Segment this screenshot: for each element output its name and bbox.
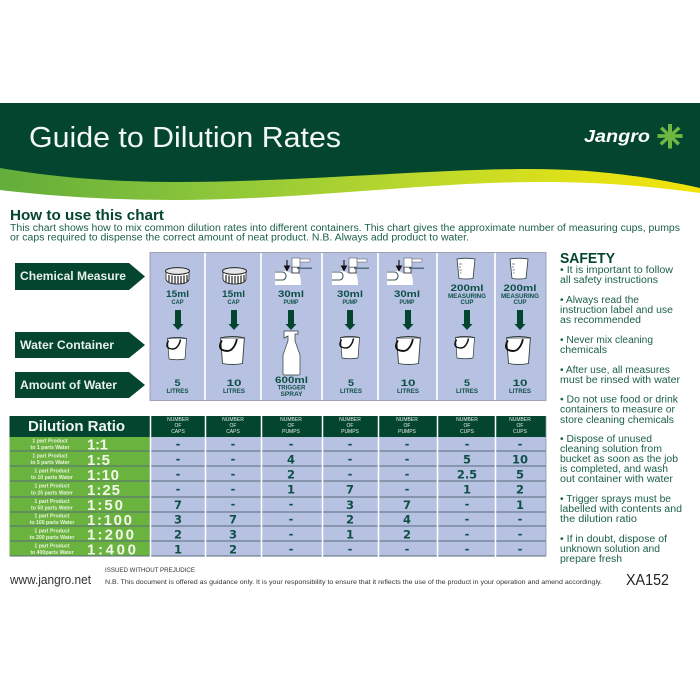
safety list: all safety instructions bbox=[560, 275, 658, 286]
row 1:1: - bbox=[405, 437, 410, 451]
row 1:10: 1:10 bbox=[87, 467, 119, 484]
row 1:10: - bbox=[231, 467, 236, 481]
row 1:5 bbox=[30, 452, 528, 469]
safety list: as recommended bbox=[560, 315, 641, 326]
row 1:10: 5 bbox=[516, 468, 524, 482]
row 1:200: 2 bbox=[403, 528, 411, 542]
row 1:100: 4 bbox=[403, 512, 411, 526]
green swoosh bbox=[0, 160, 700, 200]
safety list: must be rinsed with water bbox=[560, 375, 681, 386]
row 1:200: 2 bbox=[174, 528, 182, 542]
safety list: labelled with contents and bbox=[560, 504, 682, 515]
column 1: cap, 5 litres: LITRES bbox=[166, 389, 188, 395]
arrow label: chemical measure: Chemical Measure bbox=[20, 271, 126, 283]
arrow label: amount of water: Amount of Water bbox=[20, 380, 118, 392]
row 1:200: - bbox=[289, 527, 294, 541]
row 1:400: 1 bbox=[174, 542, 182, 556]
row 1:25: 1 bbox=[287, 482, 295, 496]
dark green band bbox=[0, 103, 700, 188]
row 1:100 bbox=[30, 512, 523, 529]
row 1:200 bbox=[30, 526, 523, 544]
row 1:5: 5 bbox=[463, 452, 471, 466]
row 1:25: - bbox=[231, 482, 236, 496]
column 6: measuring cup, 5 litres: 200ml bbox=[450, 283, 484, 293]
column 7: measuring cup, 10 litres: 10 bbox=[512, 378, 528, 388]
row 1:10: 1 part Product bbox=[34, 468, 70, 474]
safety list: • If in doubt, dispose of bbox=[560, 534, 667, 545]
row 1:400: - bbox=[289, 542, 294, 556]
row 1:5: 10 bbox=[512, 452, 528, 466]
row 1:25: 7 bbox=[346, 482, 354, 496]
row 1:10: to 10 parts Water bbox=[31, 475, 73, 481]
how to use heading: How to use this chart bbox=[10, 207, 164, 224]
row 1:50: 1 part Product bbox=[34, 499, 70, 505]
row 1:25: 2 bbox=[516, 482, 524, 496]
title: Guide to Dilution Rates bbox=[29, 122, 341, 154]
arrow label: water container: Water Container bbox=[20, 340, 115, 352]
column headers: PUMPS bbox=[282, 429, 301, 435]
issued without prejudice: ISSUED WITHOUT PREJUDICE bbox=[105, 567, 196, 574]
column headers: OF bbox=[347, 423, 353, 429]
row 1:50: - bbox=[289, 497, 294, 511]
safety list: • After use, all measures bbox=[560, 365, 670, 376]
safety list: is completed, and wash bbox=[560, 464, 668, 475]
row 1:5: to 5 parts Water bbox=[30, 460, 70, 466]
column 5: pump, 10 litres: 30ml bbox=[394, 289, 420, 299]
column 4: pump, 5 litres: 5 bbox=[348, 378, 354, 388]
column headers: NUMBER bbox=[509, 417, 531, 423]
document code: XA152 bbox=[626, 572, 669, 589]
row 1:50: 7 bbox=[403, 498, 411, 512]
column 3: pump, trigger spray: 600ml bbox=[275, 375, 308, 385]
row 1:5: - bbox=[176, 452, 181, 466]
column 1: cap, 5 litres: 5 bbox=[174, 378, 180, 388]
row 1:50: to 50 parts Water bbox=[31, 506, 73, 512]
column 7: measuring cup, 10 litres: MEASURING bbox=[501, 294, 539, 300]
how to use text bbox=[10, 223, 680, 244]
safety list: • Always read the bbox=[560, 295, 639, 306]
column headers: PUMPS bbox=[341, 429, 360, 435]
column 7: measuring cup, 10 litres: LITRES bbox=[509, 389, 531, 395]
column 7: measuring cup, 10 litres: CUP bbox=[514, 300, 526, 306]
column 7: measuring cup, 10 litres: 200ml bbox=[504, 283, 536, 293]
row 1:1: - bbox=[518, 437, 523, 451]
row 1:1: 1:1 bbox=[87, 436, 108, 454]
row 1:1: 1 part Product bbox=[32, 438, 68, 444]
column 2: cap, 10 litres: 15ml bbox=[222, 289, 245, 299]
safety list: containers to measure or bbox=[560, 404, 676, 416]
row 1:400 bbox=[30, 542, 523, 558]
column 5: pump, 10 litres: 10 bbox=[400, 378, 416, 388]
row 1:1: - bbox=[289, 437, 294, 451]
row 1:400: - bbox=[465, 542, 470, 556]
row 1:10: - bbox=[405, 467, 410, 481]
row 1:400: 1 part Product bbox=[34, 544, 70, 550]
row 1:1: - bbox=[231, 437, 236, 451]
website: www.jangro.net bbox=[9, 573, 91, 587]
row 1:50: - bbox=[465, 497, 470, 511]
safety list: • Never mix cleaning bbox=[560, 335, 653, 346]
column headers: NUMBER bbox=[167, 417, 189, 423]
row 1:25: - bbox=[405, 482, 410, 496]
row 1:25: 1 part Product bbox=[34, 484, 70, 490]
row 1:100: - bbox=[518, 512, 523, 526]
column headers: PUMPS bbox=[398, 429, 417, 435]
row 1:1 bbox=[30, 436, 523, 454]
row 1:25: 1:25 bbox=[87, 482, 120, 499]
safety list: instruction label and use bbox=[560, 305, 673, 316]
row 1:100: - bbox=[465, 512, 470, 526]
row labels bbox=[15, 263, 145, 398]
row 1:100: 2 bbox=[346, 512, 354, 526]
safety heading: SAFETY bbox=[560, 251, 615, 267]
row 1:10 bbox=[31, 467, 524, 484]
row 1:200: 1 bbox=[346, 528, 354, 542]
column 5: pump, 10 litres bbox=[387, 258, 424, 395]
row 1:5: - bbox=[231, 452, 236, 466]
column 4: pump, 5 litres: LITRES bbox=[340, 389, 362, 395]
column 6: measuring cup, 5 litres: MEASURING bbox=[448, 294, 486, 300]
row 1:1: - bbox=[176, 437, 181, 451]
footer bbox=[9, 567, 669, 589]
safety list: • Trigger sprays must be bbox=[560, 494, 671, 505]
row 1:100: 1 part Product bbox=[34, 514, 70, 520]
row 1:400: 1:400 bbox=[87, 542, 136, 558]
safety list: the dilution ratio bbox=[560, 514, 637, 525]
how to use text: This chart shows how to mix common dilution rates into different containers. This chart gives the approximate number of measuring cups, pumps bbox=[10, 223, 680, 234]
row 1:1: to 1 parts Water bbox=[30, 445, 70, 451]
row 1:1: - bbox=[348, 437, 353, 451]
safety list: store cleaning chemicals bbox=[560, 415, 674, 426]
column headers: NUMBER bbox=[396, 417, 418, 423]
row 1:25: - bbox=[176, 482, 181, 496]
row 1:100: 7 bbox=[229, 512, 237, 526]
row 1:25 bbox=[31, 482, 524, 499]
row 1:100: to 100 parts Water bbox=[30, 520, 74, 526]
column 6: measuring cup, 5 litres: 5 bbox=[464, 378, 470, 388]
dilution table bbox=[10, 416, 546, 558]
row 1:10: - bbox=[176, 467, 181, 481]
column headers: OF bbox=[288, 423, 294, 429]
column 2: cap, 10 litres: CAP bbox=[228, 300, 240, 306]
row 1:50: 1:50 bbox=[87, 497, 123, 514]
column 2: cap, 10 litres: 10 bbox=[226, 378, 242, 388]
column headers: CUPS bbox=[513, 429, 528, 435]
row 1:400: to 400parts Water bbox=[30, 550, 74, 556]
column headers: CUPS bbox=[460, 429, 475, 435]
column headers: CAPS bbox=[226, 429, 240, 435]
row 1:200: 1:200 bbox=[87, 526, 134, 544]
column 3: pump, trigger spray bbox=[275, 258, 312, 398]
column 5: pump, 10 litres: LITRES bbox=[397, 389, 419, 395]
column headers: NUMBER bbox=[222, 417, 244, 423]
safety list: bucket as soon as the job bbox=[560, 454, 678, 465]
column 1: cap, 5 litres: 15ml bbox=[166, 289, 189, 299]
row 1:200: 1 part Product bbox=[34, 528, 70, 534]
row 1:200: - bbox=[465, 527, 470, 541]
row 1:100: 1:100 bbox=[87, 512, 132, 529]
row 1:100: - bbox=[289, 512, 294, 526]
safety list: unknown solution and bbox=[560, 544, 660, 555]
column 2: cap, 10 litres bbox=[220, 268, 246, 395]
column headers bbox=[167, 417, 531, 435]
row 1:10: - bbox=[348, 467, 353, 481]
safety list: • Dispose of unused bbox=[560, 434, 652, 445]
safety list: cleaning solution from bbox=[560, 444, 662, 455]
row 1:400: - bbox=[518, 542, 523, 556]
row 1:25: 1 bbox=[463, 482, 471, 496]
row 1:5: 1:5 bbox=[87, 452, 110, 469]
row 1:400: 2 bbox=[229, 542, 237, 556]
column 1: cap, 5 litres bbox=[166, 268, 190, 395]
row 1:50: 3 bbox=[346, 498, 354, 512]
column headers: NUMBER bbox=[339, 417, 361, 423]
column headers: CAPS bbox=[171, 429, 185, 435]
column headers: OF bbox=[517, 423, 523, 429]
safety list: prepare fresh bbox=[560, 554, 622, 565]
safety panel bbox=[560, 251, 682, 565]
row 1:10: 2 bbox=[287, 468, 295, 482]
row 1:400: - bbox=[405, 542, 410, 556]
row 1:50: 7 bbox=[174, 498, 182, 512]
how to use section bbox=[10, 207, 680, 244]
column 4: pump, 5 litres: PUMP bbox=[342, 300, 358, 306]
column 3: pump, trigger spray: PUMP bbox=[284, 300, 298, 306]
row 1:50 bbox=[31, 497, 524, 514]
how to use text: or caps required to dispense the correct amount of neat product. N.B. Always add product to water. bbox=[10, 232, 469, 244]
row 1:5: - bbox=[405, 452, 410, 466]
row 1:10: 2.5 bbox=[457, 468, 477, 482]
disclaimer: N.B. This document is offered as guidance only. It is your responsibility to ensure that it reflects the use of the product in your operation and amend accordingly. bbox=[105, 579, 602, 586]
measures panel bbox=[150, 252, 546, 400]
safety list bbox=[560, 265, 682, 565]
row 1:25: to 25 parts Water bbox=[31, 490, 73, 496]
safety list: chemicals bbox=[560, 345, 607, 356]
column 3: pump, trigger spray: TRIGGER bbox=[278, 386, 306, 392]
safety list: • Do not use food or drink bbox=[560, 394, 679, 406]
column headers: OF bbox=[464, 423, 470, 429]
column 4: pump, 5 litres bbox=[332, 258, 369, 395]
column 2: cap, 10 litres: LITRES bbox=[223, 389, 245, 395]
column headers: NUMBER bbox=[456, 417, 478, 423]
row 1:100: 3 bbox=[174, 512, 182, 526]
column 3: pump, trigger spray: SPRAY bbox=[280, 392, 302, 398]
column 7: measuring cup, 10 litres bbox=[501, 258, 539, 395]
row 1:400: - bbox=[348, 542, 353, 556]
column 5: pump, 10 litres: PUMP bbox=[400, 300, 414, 306]
row 1:5: 1 part Product bbox=[32, 454, 68, 460]
row 1:5: - bbox=[348, 452, 353, 466]
column headers: OF bbox=[404, 423, 410, 429]
column 6: measuring cup, 5 litres: LITRES bbox=[456, 389, 478, 395]
row 1:200: to 200 parts Water bbox=[30, 535, 74, 541]
column headers: OF bbox=[230, 423, 236, 429]
column 3: pump, trigger spray: 30ml bbox=[278, 289, 304, 299]
row 1:50: 1 bbox=[516, 498, 524, 512]
column 4: pump, 5 litres: 30ml bbox=[337, 289, 363, 299]
logo: Jangro: Jangro bbox=[584, 126, 650, 146]
column 6: measuring cup, 5 litres: CUP bbox=[460, 300, 474, 306]
row 1:5: 4 bbox=[287, 452, 295, 466]
row 1:1: - bbox=[465, 437, 470, 451]
safety list: out container with water bbox=[560, 474, 674, 485]
table heading: dilution ratio: Dilution Ratio bbox=[28, 418, 125, 435]
safety list: • It is important to follow bbox=[560, 265, 674, 276]
header banner bbox=[0, 103, 700, 200]
row 1:50: - bbox=[231, 497, 236, 511]
row 1:200: 3 bbox=[229, 528, 237, 542]
column headers: NUMBER bbox=[280, 417, 302, 423]
icon: trigger spray bottle bbox=[283, 331, 300, 375]
column headers: OF bbox=[175, 423, 181, 429]
column 1: cap, 5 litres: CAP bbox=[172, 300, 184, 306]
column 6: measuring cup, 5 litres bbox=[448, 258, 486, 395]
row 1:200: - bbox=[518, 527, 523, 541]
logo: Jangro bbox=[584, 124, 682, 148]
